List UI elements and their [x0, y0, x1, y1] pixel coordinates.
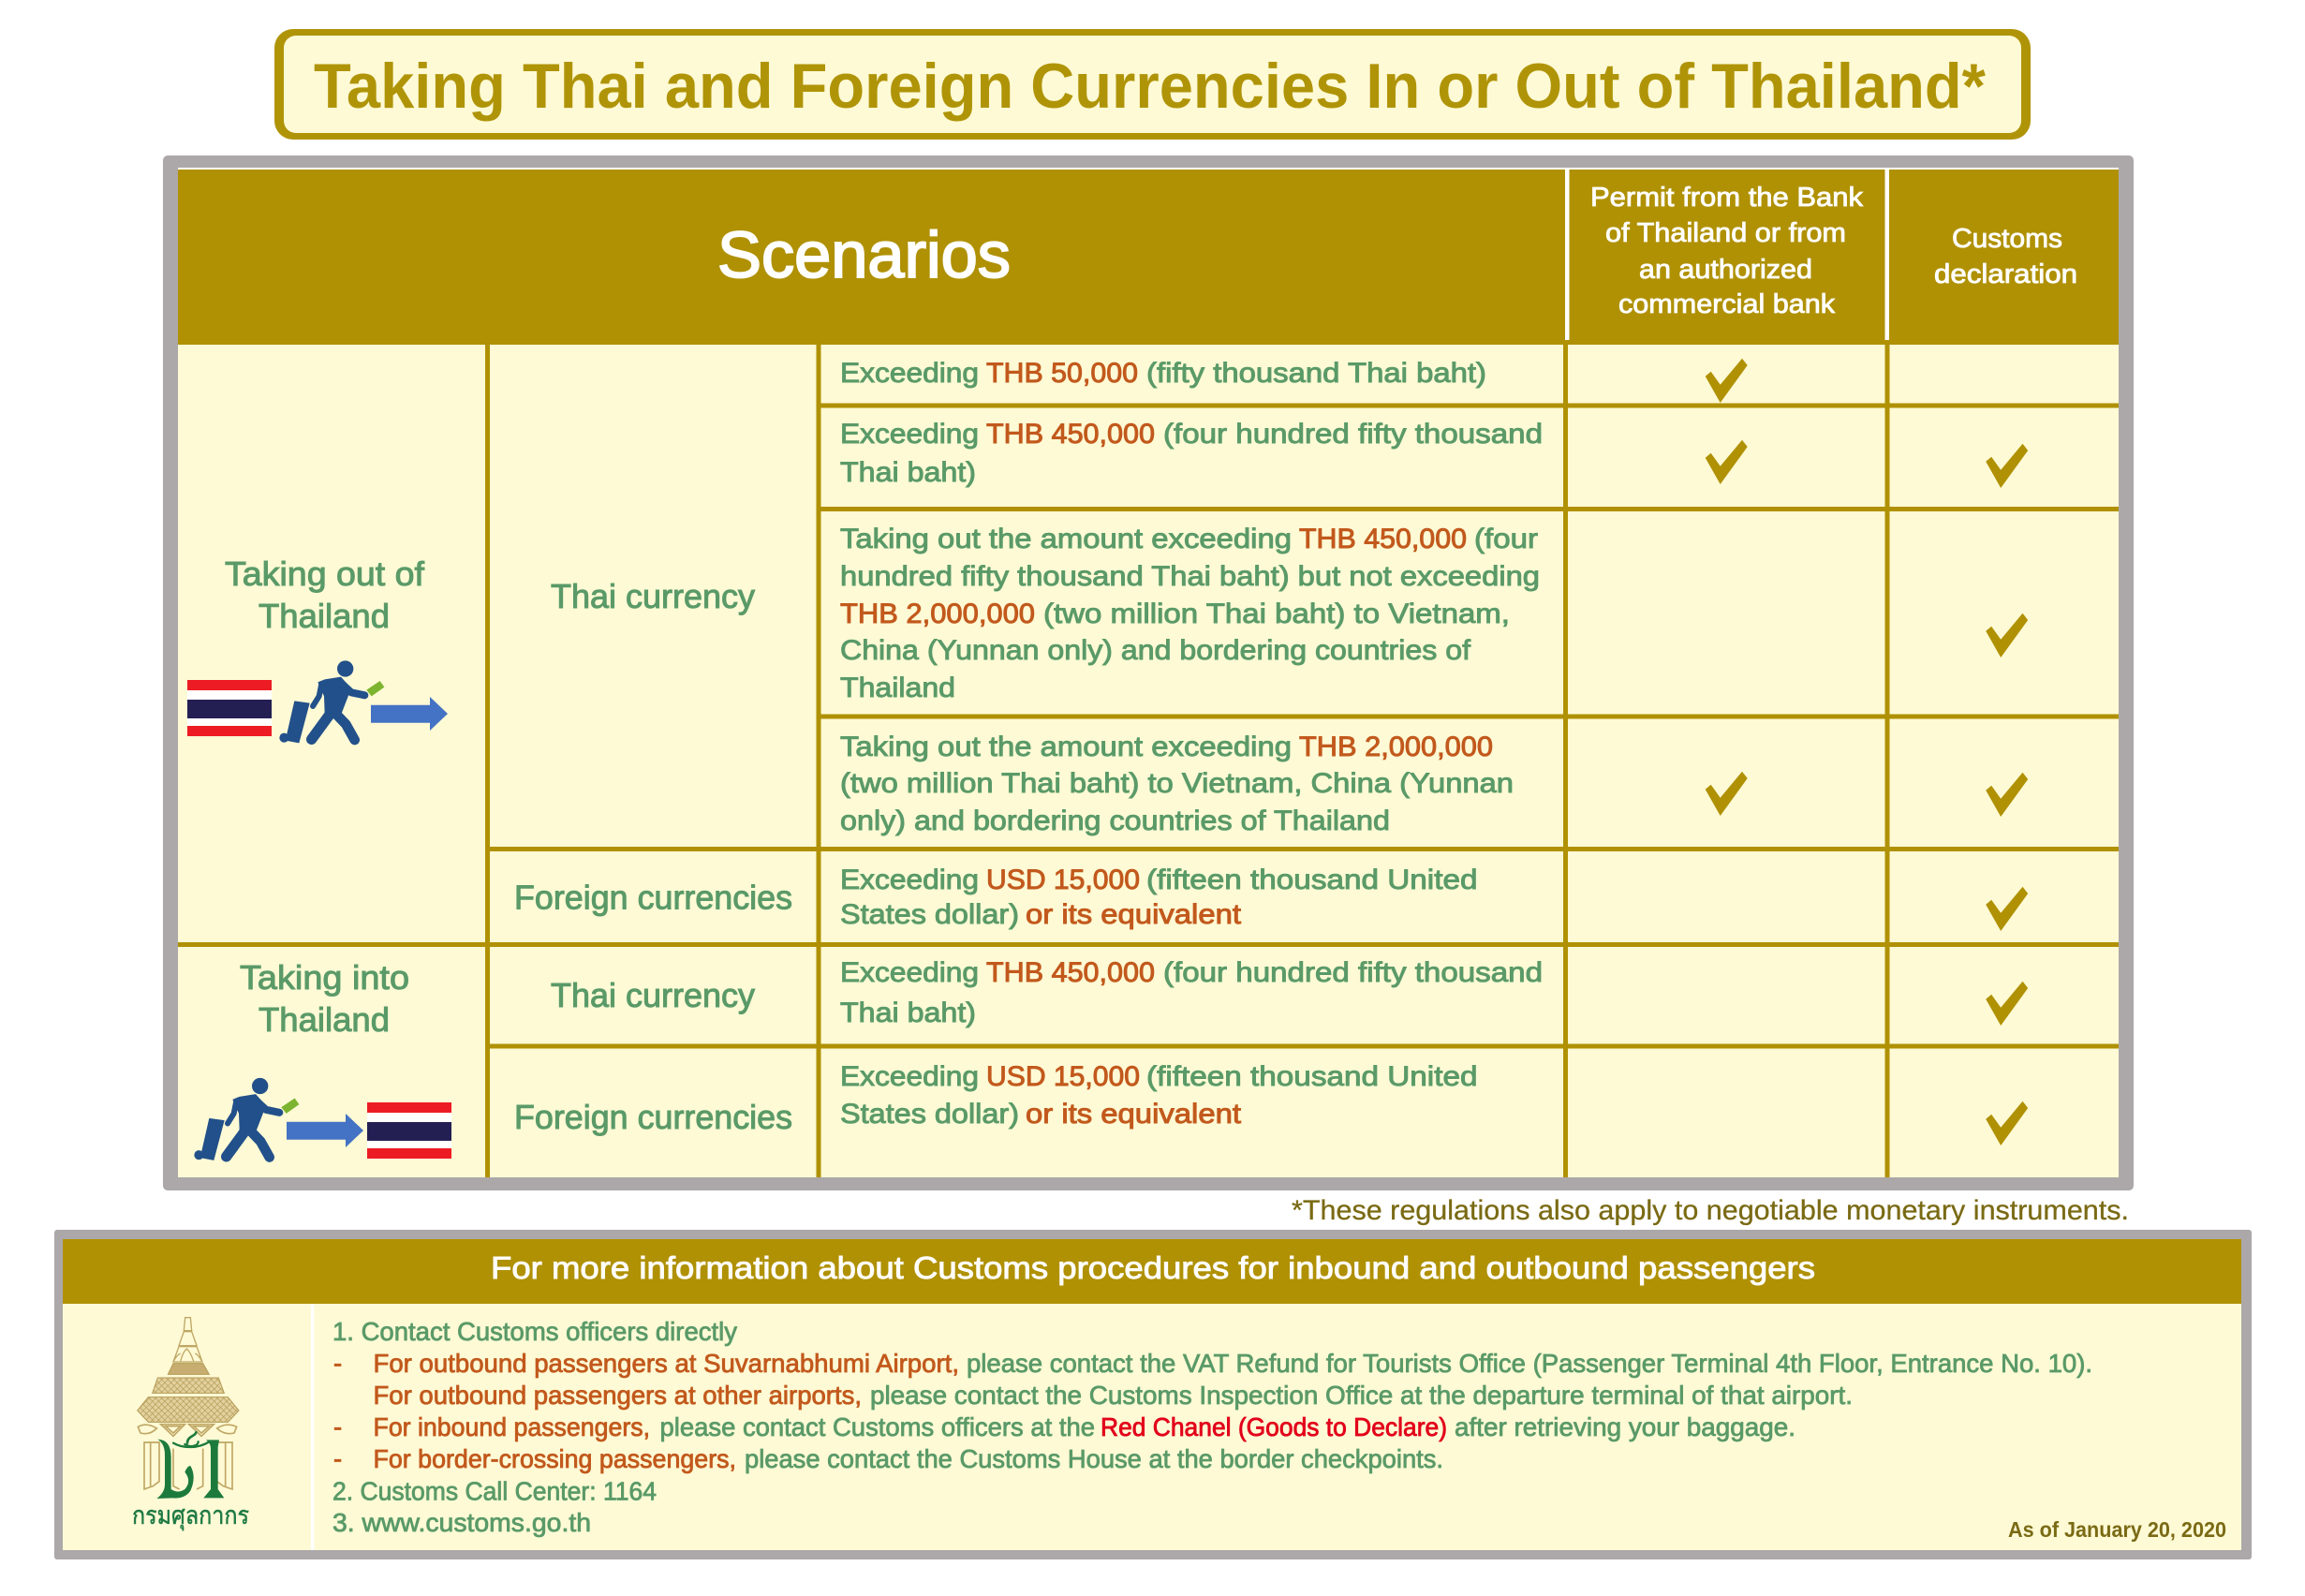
scenario text: row 4: Taking out the amount exceeding	[840, 732, 1292, 762]
arrow: departure	[371, 697, 448, 731]
scenario text: row 1: (fifty thousand Thai baht)	[1146, 358, 1486, 389]
bullet: inbound passengers: -	[333, 1412, 342, 1441]
scenario text: row 5: Exceeding	[840, 864, 979, 895]
panel: more information	[54, 1230, 2252, 1559]
scenario text: row 4: only) and bordering countries of Thailand	[840, 805, 1390, 836]
item 2: call center: 2. Customs Call Center: 1164	[332, 1476, 657, 1505]
bullet: border crossing: please contact the Customs House at the border checkpoints.	[745, 1444, 1443, 1473]
category: foreign currencies (in): Foreign currencies	[514, 1098, 792, 1136]
scenario text: row 7: Exceeding	[840, 1061, 979, 1092]
check marks: customs declaration column	[1986, 444, 2028, 1145]
panel: scenarios table	[163, 155, 2134, 1190]
bullet: Suvarnabhumi Airport: -	[333, 1349, 342, 1378]
scenario text: row 7: (fifteen thousand United	[1146, 1061, 1478, 1092]
row label: taking out of Thailand: Taking out of	[225, 554, 425, 593]
icon: Thai flag (arrival)	[367, 1102, 451, 1159]
heading: permit column: an authorized	[1639, 255, 1812, 285]
bullet: Suvarnabhumi Airport: please contact the VAT Refund for Tourists Office (Passenger Terminal 4th Floor, Entrance No. 10).	[967, 1349, 2092, 1378]
bullet: other airports: For outbound passengers at other airports,	[373, 1381, 862, 1410]
scenario text: row 6: Thai baht)	[840, 998, 976, 1028]
scenario text: row 7	[840, 1061, 1478, 1130]
scenario text: row 6: Exceeding	[840, 957, 979, 988]
scenario text: row 4	[840, 732, 1514, 836]
row label: taking out of Thailand	[225, 554, 425, 635]
scenario text: row 4: (two million Thai baht) to Vietnam, China (Yunnan	[840, 768, 1514, 799]
bullet: inbound passengers: For inbound passengers,	[373, 1412, 650, 1441]
bullet: Suvarnabhumi Airport	[333, 1349, 2092, 1378]
scenario text: row 1: Exceeding	[840, 358, 979, 389]
heading: customs declaration column: Customs	[1952, 224, 2062, 254]
heading: scenarios: Scenarios	[717, 218, 1011, 291]
bullet: border crossing: -	[333, 1444, 342, 1473]
scenario text: row 3: THB 450,000	[1299, 524, 1467, 554]
panel header	[63, 1239, 2241, 1304]
scenario text: row 5	[840, 864, 1478, 930]
table grid lines	[178, 345, 2119, 1177]
scenario text: row 5: States dollar)	[840, 899, 1019, 930]
scenario text: row 2	[840, 419, 1543, 488]
item 1 heading: 1. Contact Customs officers directly	[332, 1317, 737, 1346]
icon: traveller (departure)	[279, 660, 384, 743]
bullet: inbound passengers: after retrieving your baggage.	[1455, 1412, 1795, 1441]
bullet: border crossing	[333, 1444, 1443, 1473]
scenario text: row 1: THB 50,000	[986, 358, 1138, 389]
item 3: website: 3. www.customs.go.th	[332, 1508, 591, 1537]
scenario text: row 5: or its equivalent	[1026, 899, 1241, 930]
scenario text: row 6: THB 450,000	[986, 957, 1155, 988]
scenario text: row 3: (two million Thai baht) to Vietnam,	[1043, 598, 1510, 629]
bullet: inbound passengers: Red Chanel (Goods to Declare)	[1101, 1412, 1447, 1441]
heading: customs declaration column	[1934, 224, 2077, 289]
scenario text: row 6: (four hundred fifty thousand	[1163, 957, 1543, 988]
scenario text: row 7: States dollar)	[840, 1099, 1019, 1130]
scenario text: row 4: THB 2,000,000	[1299, 732, 1493, 762]
scenario text: row 3: (four	[1474, 524, 1538, 554]
scenario text: row 5: USD 15,000	[986, 864, 1140, 895]
footnote: *These regulations also apply to negotiable monetary instruments.	[1292, 1195, 2129, 1226]
scenario text: row 3: hundred fifty thousand Thai baht) but not exceeding	[840, 561, 1540, 592]
date stamp: As of January 20, 2020	[2008, 1517, 2226, 1542]
category: Thai currency (in): Thai currency	[551, 976, 755, 1014]
bullet: Suvarnabhumi Airport: For outbound passengers at Suvarnabhumi Airport,	[373, 1349, 959, 1378]
icon: traveller (arrival)	[194, 1078, 299, 1160]
scenario text: row 2: Thai baht)	[840, 457, 976, 488]
bullet: inbound passengers	[333, 1412, 1795, 1441]
contact list	[332, 1317, 2092, 1537]
bullet: other airports	[373, 1381, 1853, 1410]
bullet: other airports: please contact the Customs Inspection Office at the departure terminal of that airport.	[870, 1381, 1853, 1410]
bullet: border crossing: For border-crossing passengers,	[373, 1444, 736, 1473]
scenario text: row 1	[840, 358, 1486, 389]
scenario text: row 5: (fifteen thousand United	[1146, 864, 1478, 895]
heading: customs declaration column: declaration	[1934, 259, 2077, 289]
heading: permit column: of Thailand or from	[1605, 218, 1846, 248]
heading: permit column: Permit from the Bank	[1590, 183, 1864, 213]
row label: taking out of Thailand: Thailand	[259, 597, 390, 635]
logo: Customs Department	[132, 1318, 249, 1531]
logo caption: กรมศุลกากร	[132, 1501, 249, 1531]
scenario text: row 2: (four hundred fifty thousand	[1163, 419, 1543, 450]
scenario text: row 2: THB 450,000	[986, 419, 1155, 450]
scenario text: row 3: THB 2,000,000	[840, 598, 1035, 629]
row label: taking into Thailand: Taking into	[240, 958, 409, 997]
panel header: For more information about Customs procedures for inbound and outbound passengers	[491, 1251, 1815, 1286]
table header	[178, 170, 2119, 345]
title: Taking Thai and Foreign Currencies In or Out of Thailand*	[314, 51, 1987, 122]
row label: taking into Thailand	[240, 958, 409, 1039]
scenario text: row 7: USD 15,000	[986, 1061, 1140, 1092]
scenario text: row 7: or its equivalent	[1026, 1099, 1241, 1130]
title	[274, 29, 2031, 140]
icon: Thai flag (departure)	[187, 680, 272, 736]
category: foreign currencies (out): Foreign currencies	[514, 879, 792, 916]
row label: taking into Thailand: Thailand	[259, 1000, 390, 1039]
bullet: inbound passengers: please contact Customs officers at the	[659, 1412, 1095, 1441]
heading: permit column: commercial bank	[1618, 289, 1836, 319]
scenario text: row 2: Exceeding	[840, 419, 979, 450]
check marks: permit column	[1706, 359, 1748, 816]
arrow: arrival	[287, 1114, 363, 1147]
scenario text: row 3: Taking out the amount exceeding	[840, 524, 1292, 554]
scenario text: row 6	[840, 957, 1543, 1028]
scenario text: row 3: Thailand	[840, 672, 955, 703]
category: Thai currency (out): Thai currency	[551, 577, 755, 615]
scenario text: row 3: China (Yunnan only) and bordering countries of	[840, 635, 1471, 666]
heading: permit column	[1590, 183, 1864, 319]
scenario text: row 3	[840, 524, 1540, 703]
